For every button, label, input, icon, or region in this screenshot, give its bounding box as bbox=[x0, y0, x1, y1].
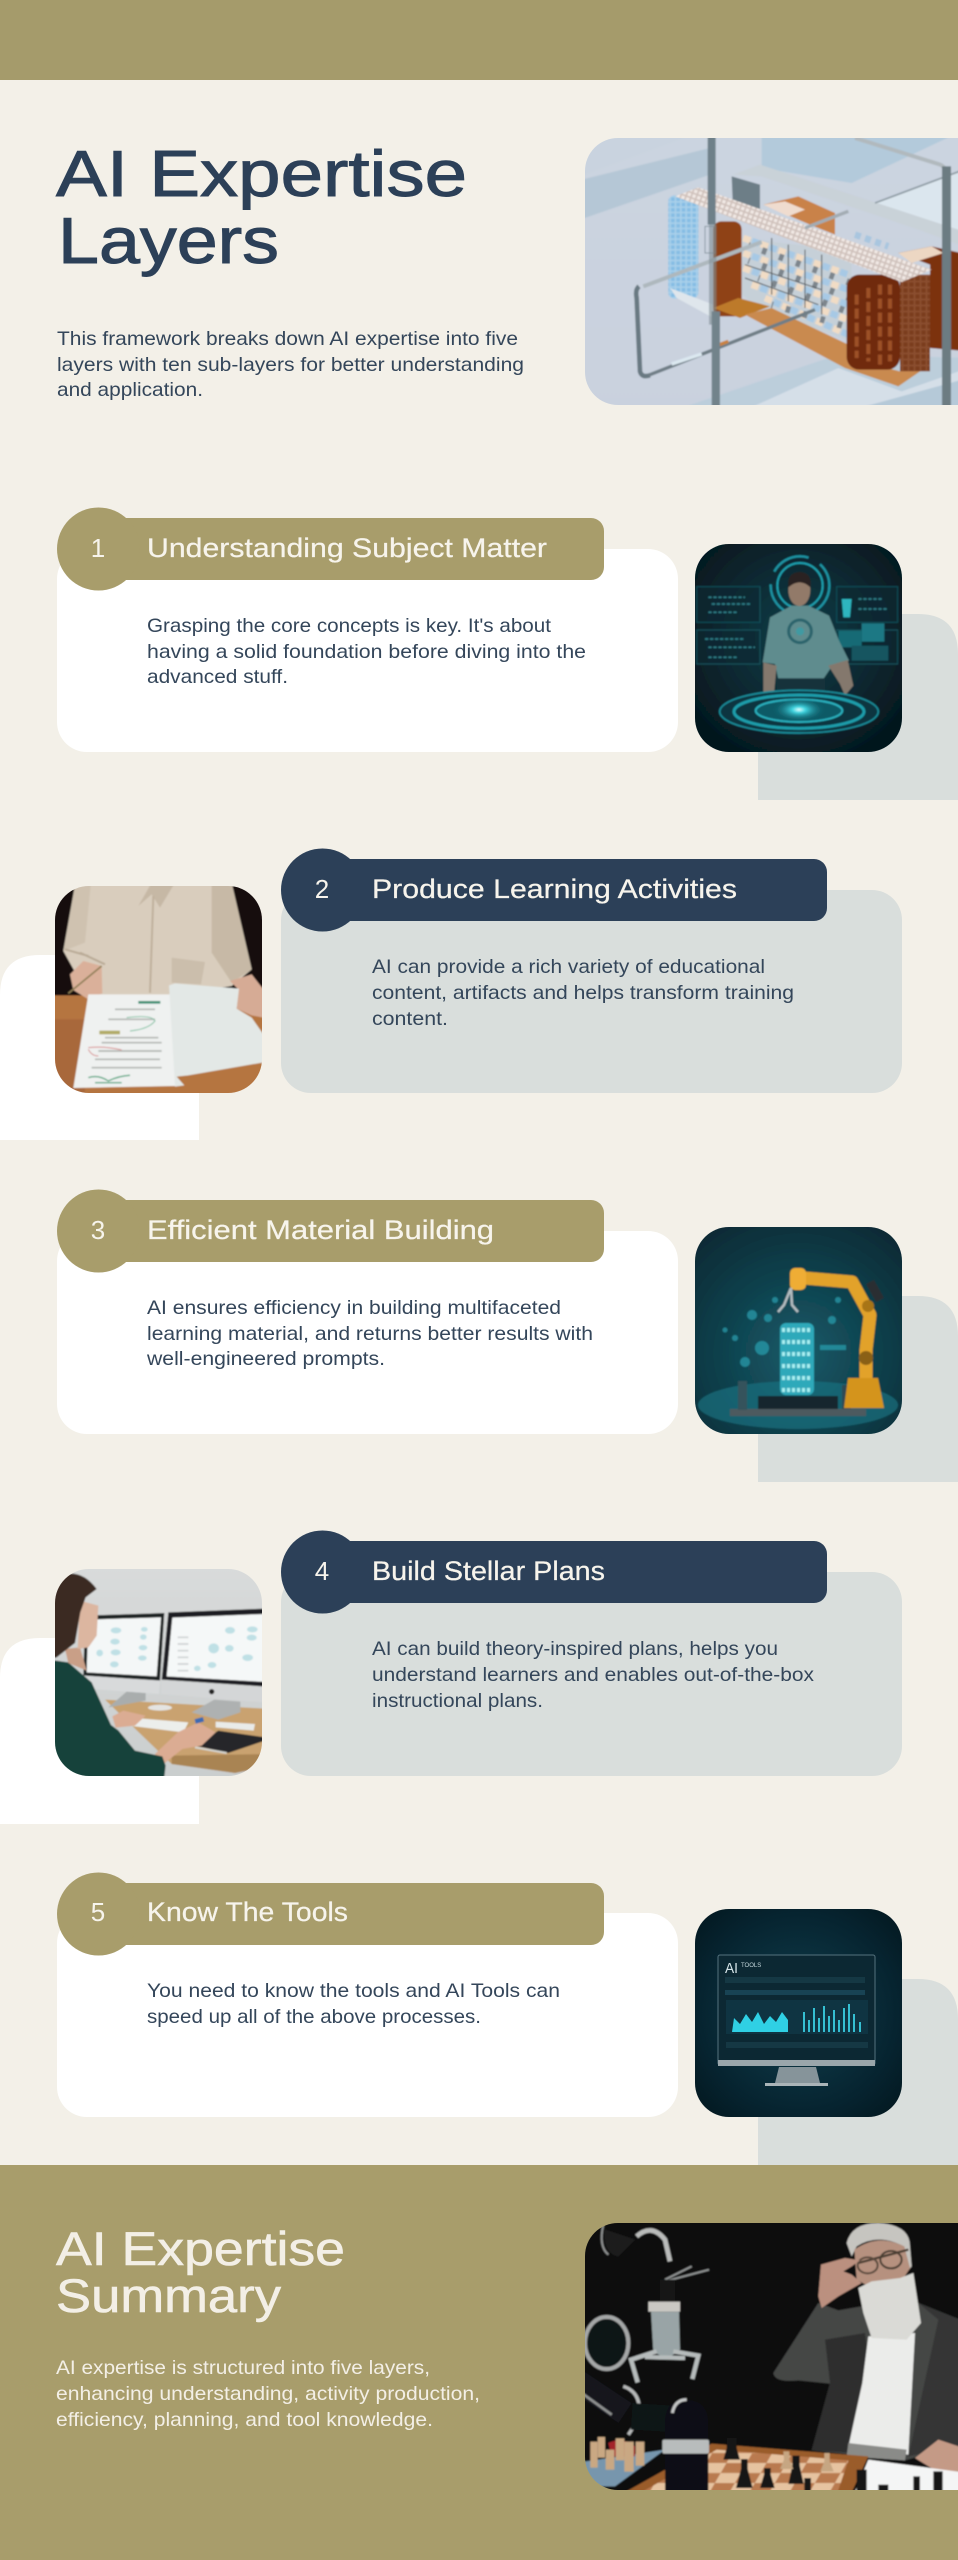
intro text: and application. bbox=[57, 379, 203, 401]
image: robot arm with glowing data tower bbox=[695, 1227, 902, 1434]
summary heading: AI Expertise bbox=[56, 2222, 345, 2275]
header bar with number: 3 bbox=[91, 1215, 105, 1245]
header bar with number: Produce Learning Activities bbox=[372, 874, 737, 904]
panel: layer 2 bbox=[281, 848, 902, 1093]
body text bbox=[372, 1638, 814, 1712]
intro text: layers with ten sub-layers for better understanding bbox=[57, 354, 524, 376]
image: man with holographic interface bbox=[695, 544, 902, 752]
body text: AI ensures efficiency in building multifaceted bbox=[147, 1297, 561, 1319]
title: AI Expertise bbox=[56, 137, 467, 210]
panel: layer 5 bbox=[57, 1872, 678, 2117]
body text: content. bbox=[372, 1008, 448, 1030]
header bar with number bbox=[281, 848, 827, 932]
header bar with number bbox=[57, 508, 604, 590]
body text: advanced stuff. bbox=[147, 666, 288, 688]
header bar with number: Understanding Subject Matter bbox=[147, 533, 547, 563]
body text: understand learners and enables out-of-the-box bbox=[372, 1664, 814, 1686]
header bar with number: 1 bbox=[91, 533, 105, 563]
body text: content, artifacts and helps transform training bbox=[372, 982, 794, 1004]
summary text: AI expertise is structured into five layers, bbox=[56, 2357, 430, 2379]
header bar with number bbox=[281, 1530, 827, 1614]
header bar with number: Efficient Material Building bbox=[147, 1215, 494, 1245]
card bbox=[281, 1572, 902, 1776]
image: bearded man and robot arm playing chess bbox=[575, 2213, 958, 2500]
header bar with number: Know The Tools bbox=[147, 1897, 348, 1927]
footer panel bbox=[0, 2165, 958, 2560]
header bar with number bbox=[57, 1190, 604, 1272]
header bar with number bbox=[57, 1872, 604, 1956]
panel: layer 3 bbox=[57, 1190, 678, 1434]
decorative block: right row 3 bbox=[758, 1296, 958, 1482]
decorative block: right row 1 bbox=[758, 614, 958, 800]
panel: layer 1 bbox=[57, 508, 678, 752]
header bar with number: 5 bbox=[91, 1897, 105, 1927]
header bar with number: 4 bbox=[315, 1556, 329, 1586]
body text bbox=[147, 1980, 560, 2028]
image: woman at two monitors bbox=[55, 1569, 262, 1776]
summary text bbox=[56, 2357, 480, 2431]
intro text: This framework breaks down AI expertise into five bbox=[57, 328, 518, 350]
image: AI tools dashboard on monitor bbox=[695, 1909, 902, 2117]
decorative block: left row 4 bbox=[0, 1638, 199, 1824]
body text: well-engineered prompts. bbox=[146, 1348, 385, 1370]
body text: AI can build theory-inspired plans, helps you bbox=[372, 1638, 778, 1660]
intro text bbox=[57, 328, 524, 401]
body text bbox=[146, 1297, 593, 1370]
body text: having a solid foundation before diving into the bbox=[147, 641, 586, 663]
summary heading: Summary bbox=[56, 2269, 282, 2322]
summary text: efficiency, planning, and tool knowledge. bbox=[56, 2409, 433, 2431]
decorative block: left row 2 bbox=[0, 955, 199, 1140]
body text: AI can provide a rich variety of educational bbox=[372, 956, 765, 978]
summary heading bbox=[56, 2222, 345, 2322]
image: AI tools dashboard on monitor: TOOLS bbox=[741, 1963, 761, 1969]
image: person reviewing annotated document bbox=[55, 886, 262, 1093]
body text bbox=[147, 615, 586, 688]
decorative block: right row 5 bbox=[758, 1979, 958, 2165]
body text: instructional plans. bbox=[372, 1690, 543, 1712]
body text: learning material, and returns better results with bbox=[147, 1323, 593, 1345]
header bar with number: Build Stellar Plans bbox=[372, 1556, 605, 1586]
card bbox=[281, 890, 902, 1093]
header bar with number: 2 bbox=[315, 874, 329, 904]
body text: Grasping the core concepts is key. It's about bbox=[147, 615, 552, 637]
card bbox=[57, 1913, 678, 2117]
summary text: enhancing understanding, activity production, bbox=[56, 2383, 480, 2405]
title bbox=[56, 137, 467, 277]
body text: You need to know the tools and AI Tools can bbox=[147, 1980, 560, 2002]
body text bbox=[372, 956, 794, 1030]
top banner bbox=[0, 0, 958, 80]
card bbox=[57, 1231, 678, 1434]
card bbox=[57, 549, 678, 752]
title: Layers bbox=[58, 204, 279, 277]
image: AI tools dashboard on monitor: AI bbox=[725, 1960, 738, 1977]
hero image: glass circuit module bbox=[575, 128, 958, 415]
panel: layer 4 bbox=[281, 1530, 902, 1776]
body text: speed up all of the above processes. bbox=[147, 2006, 481, 2028]
